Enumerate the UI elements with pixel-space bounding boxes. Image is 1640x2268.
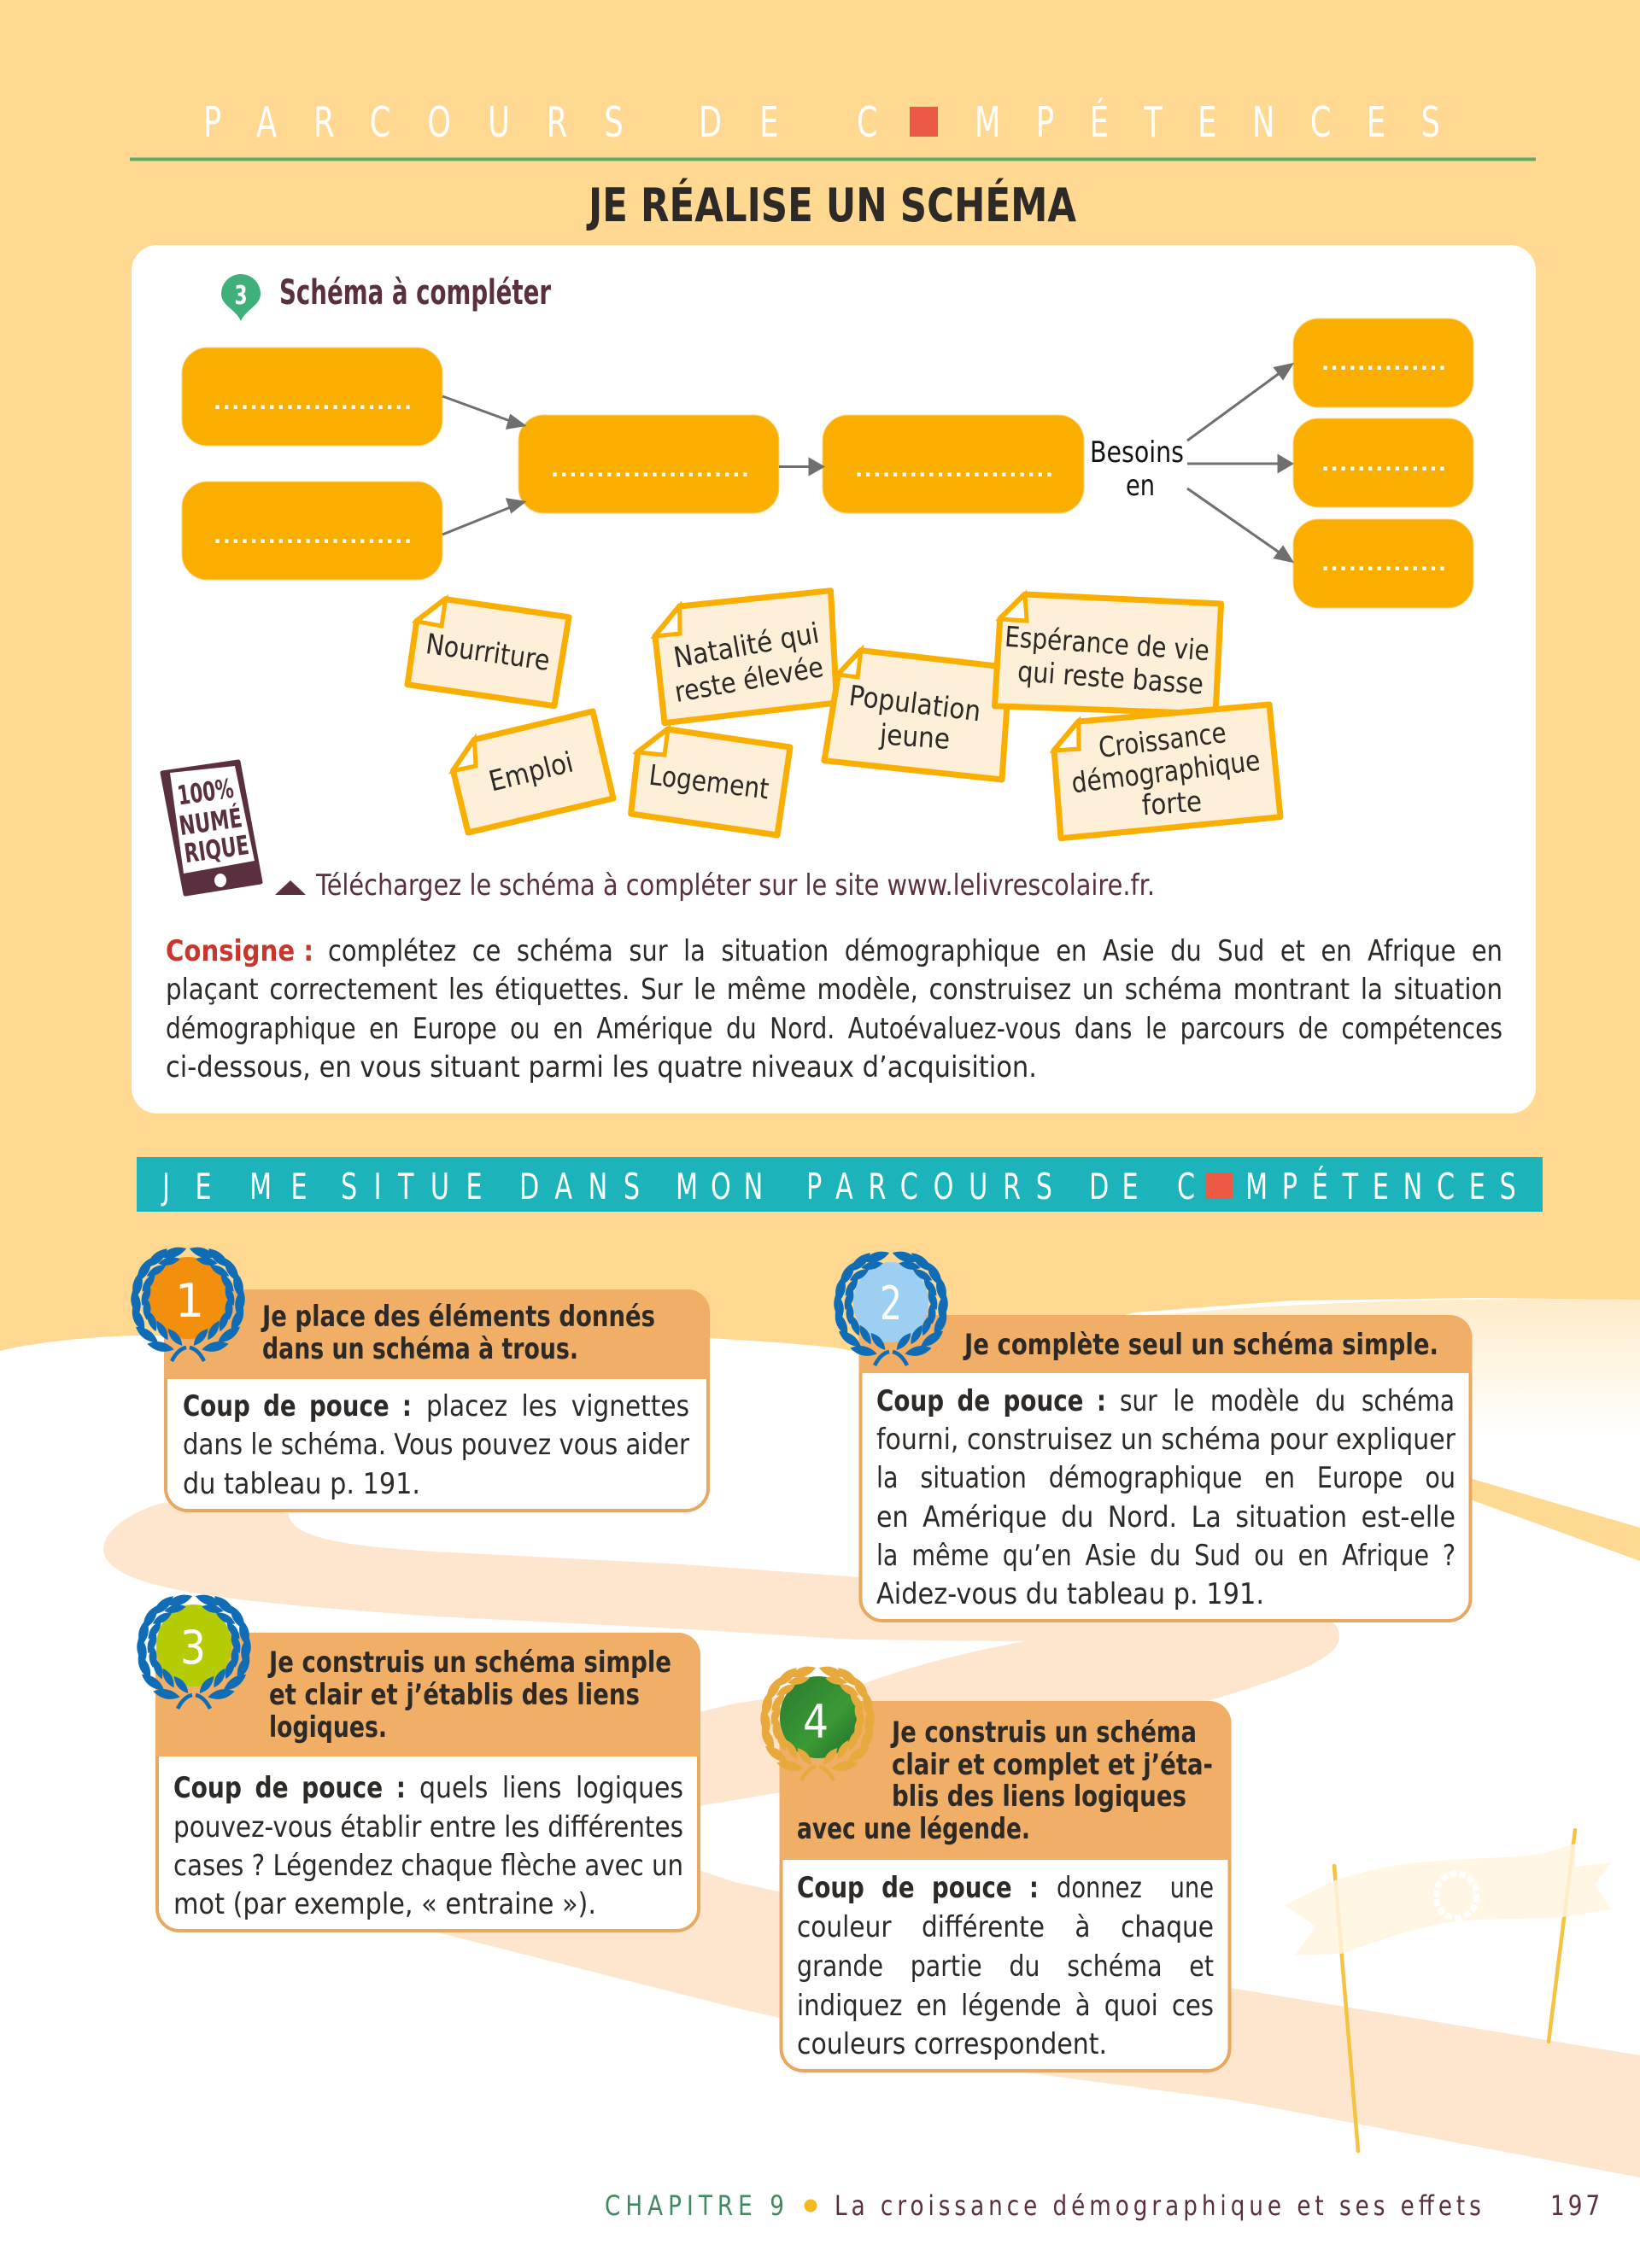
sticker: croissance démographique: Croissance xyxy=(1097,716,1228,764)
card 4: blis des liens logiques xyxy=(892,1780,1186,1814)
medal 4 xyxy=(758,1663,877,1780)
footer: chapter and page number: CHAPITRE 9 xyxy=(605,2189,784,2222)
card 4: Je construis un schéma xyxy=(890,1716,1197,1750)
card 2: fourni, construisez un schéma pour expliquer xyxy=(876,1423,1456,1457)
blank dotted placeholders: .............. xyxy=(1321,552,1446,576)
card 2 xyxy=(831,1248,1473,1621)
card 2: Je complète seul un schéma simple. xyxy=(963,1328,1438,1362)
card 2: en Amérique du Nord. La situation est-elle xyxy=(876,1500,1456,1534)
card 2: Aidez-vous du tableau p. 191. xyxy=(876,1577,1264,1611)
card 1: dans le schéma. Vous pouvez vous aider xyxy=(183,1428,689,1462)
sticker: nourriture: Nourriture xyxy=(424,627,552,677)
sticker: croissance démographique xyxy=(1054,704,1280,839)
sticker: espérance de vie: qui reste basse xyxy=(1016,654,1204,701)
header: parcours de compétences: DE xyxy=(699,98,779,148)
medal 1 xyxy=(128,1244,248,1361)
sticker: natalité: Natalité qui xyxy=(671,616,822,675)
sticker: population: Population xyxy=(847,679,982,728)
card 1: Coup de pouce : xyxy=(183,1389,412,1423)
header: parcours de compétences xyxy=(130,97,1536,161)
card 1 xyxy=(128,1244,710,1511)
card 2: sur le modèle du schéma xyxy=(1120,1384,1455,1418)
medal 1: 1 xyxy=(175,1274,204,1328)
card 3: pouvez-vous établir entre les différentes xyxy=(173,1810,683,1844)
sticker: population: jeune xyxy=(878,717,951,756)
card 2: la situation démographique en Europe ou xyxy=(876,1461,1456,1495)
card 4: indiquez en légende à quoi ces xyxy=(797,1989,1214,2023)
icon: finish flag xyxy=(1285,1830,1611,2151)
card 3: Coup de pouce : xyxy=(173,1771,406,1805)
card 2: Coup de pouce : xyxy=(876,1384,1106,1418)
sticker: emploi: Emploi xyxy=(485,745,577,798)
medal 3: 3 xyxy=(180,1621,206,1675)
sticker: logement: Logement xyxy=(647,758,771,805)
title: JE RÉALISE UN SCHÉMA xyxy=(586,178,1076,232)
consigne text block xyxy=(166,934,1502,1084)
diagram: orange boxes xyxy=(182,319,1473,608)
icon: phone 100% numérique: RIQUE xyxy=(182,830,251,869)
banner: je me situe: JE xyxy=(161,1166,212,1207)
medal 3 xyxy=(134,1592,254,1709)
card 4: couleur différente à chaque xyxy=(797,1910,1214,1944)
icon: location pin 3: 3 xyxy=(234,281,248,311)
label: besoins en: Besoins xyxy=(1090,435,1184,470)
card 4: donnez une xyxy=(1057,1871,1214,1905)
banner: je me situe: C xyxy=(1177,1166,1195,1207)
card 4: avec une légende. xyxy=(797,1812,1030,1846)
blank dotted placeholders: .............. xyxy=(1321,351,1446,375)
card 3: logiques. xyxy=(269,1710,387,1745)
sticker: croissance démographique: démographique xyxy=(1069,744,1262,799)
card 3 xyxy=(134,1592,700,1931)
card 3: et clair et j’établis des liens xyxy=(269,1678,640,1712)
sticker: croissance démographique: forte xyxy=(1141,785,1203,821)
panel: schéma à compléter xyxy=(132,245,1536,1114)
blank dotted placeholders: ...................... xyxy=(855,458,1053,482)
sticker: natalité xyxy=(655,591,837,723)
card 3: Je construis un schéma simple xyxy=(267,1645,671,1680)
arrows xyxy=(442,365,1292,561)
card 3: mot (par exemple, « entraine »). xyxy=(173,1887,596,1921)
header: parcours de compétences: MPÉTENCES xyxy=(975,97,1440,148)
card 4: Coup de pouce : xyxy=(797,1871,1039,1905)
banner: je me situe: PARCOURS xyxy=(806,1166,1052,1207)
banner: je me situe: MON xyxy=(676,1166,763,1207)
footer: chapter and page number xyxy=(605,2189,1600,2222)
card 2: la même qu’en Asie du Sud ou en Afrique ? xyxy=(876,1539,1456,1573)
card 4: clair et complet et j’éta- xyxy=(892,1748,1213,1782)
blank dotted placeholders: ...................... xyxy=(214,390,412,414)
medal 2 xyxy=(831,1248,951,1365)
sticker: logement xyxy=(631,729,790,835)
banner: je me situe xyxy=(137,1157,1543,1212)
banner: je me situe: DE xyxy=(1089,1166,1139,1207)
panel subtitle: Schéma à compléter xyxy=(279,273,551,313)
consigne text block: Consigne : xyxy=(166,934,313,968)
card 4: grande partie du schéma et xyxy=(797,1949,1214,1984)
banner: je me situe: SITUE xyxy=(341,1166,483,1207)
card 4: couleurs correspondent. xyxy=(797,2027,1107,2061)
banner: je me situe: MPÉTENCES xyxy=(1245,1165,1516,1207)
blank dotted placeholders: ...................... xyxy=(551,458,749,482)
medal 2: 2 xyxy=(880,1277,902,1330)
card 3: cases ? Légendez chaque flèche avec un xyxy=(173,1849,683,1883)
sticker: natalité: reste élevée xyxy=(672,650,826,709)
banner: je me situe: ME xyxy=(249,1166,308,1207)
consigne text block: ci-dessous, en vous situant parmi les quatre niveaux d’acquisition. xyxy=(166,1050,1037,1084)
header: parcours de compétences: PARCOURS xyxy=(203,98,624,148)
blank dotted placeholders: .............. xyxy=(1321,452,1446,476)
blank dotted placeholders: ...................... xyxy=(214,524,412,548)
blank dotted placeholders xyxy=(214,351,1446,576)
label: besoins en: en xyxy=(1126,469,1155,503)
card 1: placez les vignettes xyxy=(426,1389,689,1423)
sticker: espérance de vie: Espérance de vie xyxy=(1004,620,1210,667)
sticker: nourriture xyxy=(407,599,569,706)
download note: Téléchargez le schéma à compléter sur le site www.lelivrescolaire.fr. xyxy=(315,868,1155,903)
card 3: quels liens logiques xyxy=(419,1771,683,1805)
icon: phone 100% numérique: 100% xyxy=(175,774,236,812)
header: parcours de compétences: C xyxy=(857,98,878,148)
sticker: population xyxy=(824,651,1010,780)
banner: je me situe: DANS xyxy=(519,1166,640,1207)
sticker: espérance de vie xyxy=(994,594,1221,714)
icon: phone 100% numérique xyxy=(162,762,261,894)
sticker: emploi xyxy=(453,711,613,833)
card 1: du tableau p. 191. xyxy=(183,1467,420,1501)
medal 4: 4 xyxy=(803,1695,829,1749)
footer: chapter and page number: La croissance démographique et ses effets xyxy=(835,2189,1481,2222)
icon: location pin 3 xyxy=(221,274,261,321)
label: besoins en xyxy=(1090,435,1184,503)
icon: phone 100% numérique: NUMÉ xyxy=(177,803,244,842)
footer: chapter and page number: 197 xyxy=(1550,2189,1600,2222)
card 1: Je place des éléments donnés xyxy=(261,1300,655,1334)
card 1: dans un schéma à trous. xyxy=(262,1332,578,1366)
card 4 xyxy=(758,1663,1232,2071)
